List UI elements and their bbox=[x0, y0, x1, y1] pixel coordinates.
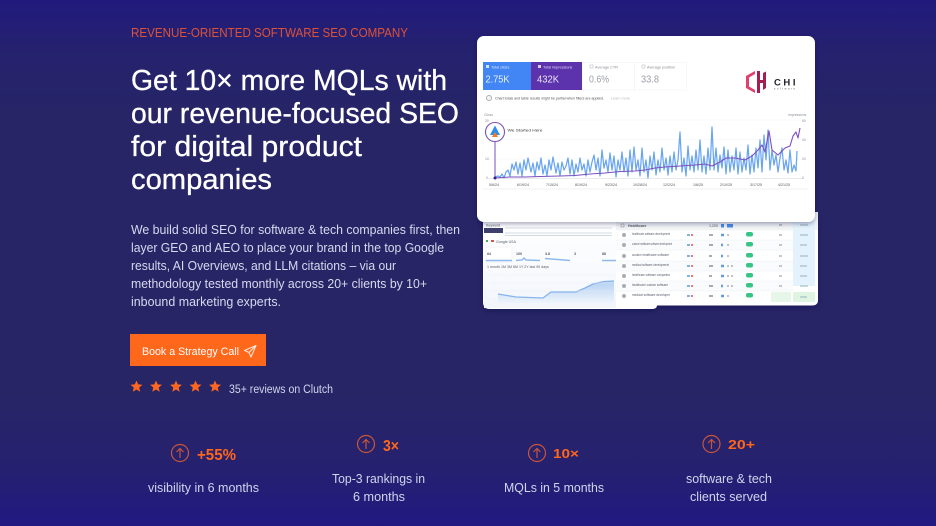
line chart: clicks and impressions: Clicks bbox=[484, 113, 493, 117]
description text: methodology tested monthly across 20+ clients by 10+ bbox=[131, 277, 427, 291]
metric tile: average position bbox=[634, 62, 686, 90]
stat: visibility bbox=[148, 444, 259, 495]
heading: for digital product bbox=[131, 131, 362, 163]
metric tile: average CTR: Average CTR bbox=[595, 66, 618, 70]
line chart: clicks and impressions: 30 bbox=[485, 119, 489, 123]
keyword rows: custom healthcare software development bbox=[632, 242, 672, 246]
date labels: 9/23/24 bbox=[605, 183, 617, 187]
row status badges bbox=[746, 232, 753, 298]
stat: top-3 rankings: Top-3 rankings in bbox=[332, 472, 425, 486]
stat: visibility: visibility in 6 months bbox=[148, 481, 259, 495]
impressions series bbox=[495, 128, 800, 178]
stat: clients served: 20+ bbox=[728, 438, 755, 452]
right panel: keyword table: Healthcare bbox=[628, 224, 646, 228]
date labels: 12/2/24 bbox=[663, 183, 675, 187]
dashboard card: search console chart bbox=[477, 36, 815, 222]
metric tile: average CTR bbox=[582, 62, 634, 90]
logo: CHI software bbox=[746, 71, 796, 93]
date labels: 10/28/24 bbox=[633, 183, 647, 187]
stat: visibility: +55% bbox=[197, 447, 236, 464]
description text: results, AI Overviews, and LLM citations – via our bbox=[131, 259, 396, 273]
date labels: 6/19/24 bbox=[517, 183, 529, 187]
stat: clients served: software & tech bbox=[686, 472, 772, 486]
keyword rows: healthcare software development bbox=[632, 232, 670, 236]
left panel: rank tracker bbox=[484, 222, 616, 308]
keyword rows: healthcare custom software bbox=[632, 283, 668, 287]
keyword rows: medical software development bbox=[632, 263, 669, 267]
heading bbox=[131, 65, 459, 196]
date labels: 7/15/24 bbox=[546, 183, 558, 187]
metric tile: average position: Average position bbox=[647, 66, 675, 70]
stat: clients served bbox=[686, 436, 772, 504]
stat: top-3 rankings bbox=[332, 436, 425, 504]
description text: inbound marketing experts. bbox=[131, 295, 281, 309]
keyword rows: healthcare software companies bbox=[632, 273, 670, 277]
left panel: rank tracker: 88 bbox=[602, 252, 606, 256]
date labels: 4/21/25 bbox=[778, 183, 790, 187]
heading: Get 10× more MQLs with bbox=[131, 65, 447, 97]
date labels: 3/17/25 bbox=[750, 183, 762, 187]
logo: CHI software: software bbox=[774, 86, 795, 90]
left panel: rank tracker: 3.8 bbox=[545, 252, 550, 256]
right panel: keyword table bbox=[616, 212, 818, 302]
metric tile: total clicks: 2.75K bbox=[486, 74, 510, 86]
notice text bbox=[486, 95, 630, 101]
date labels: 1/6/25 bbox=[693, 183, 703, 187]
start marker: we started here: We Started Here bbox=[508, 128, 542, 132]
stat: MQLs bbox=[504, 444, 604, 495]
star rating bbox=[131, 380, 221, 392]
metric tile: average position: 33.8 bbox=[641, 74, 659, 86]
heading: our revenue-focused SEO bbox=[131, 98, 459, 130]
dashboard card: back table bbox=[483, 212, 818, 309]
button: book a strategy call bbox=[130, 334, 266, 366]
right panel: keyword table: 1,200 bbox=[709, 224, 718, 228]
eyebrow: REVENUE-ORIENTED SOFTWARE SEO COMPANY bbox=[131, 26, 409, 40]
metric tile: total impressions bbox=[531, 62, 582, 90]
line chart: clicks and impressions: 20 bbox=[802, 157, 806, 161]
line chart: clicks and impressions: 10 bbox=[485, 157, 489, 161]
stat: top-3 rankings: 6 months bbox=[353, 490, 405, 504]
description text: We build solid SEO for software & tech companies first, then bbox=[131, 223, 460, 237]
left panel: rank tracker: Keyword bbox=[486, 224, 500, 228]
date labels: 5/6/24 bbox=[489, 183, 499, 187]
metric tile: total clicks bbox=[483, 62, 531, 90]
stat: clients served: clients served bbox=[690, 490, 767, 504]
line chart: clicks and impressions: 40 bbox=[802, 138, 806, 142]
date labels bbox=[489, 183, 790, 187]
keyword rows bbox=[632, 232, 672, 297]
stat: MQLs: MQLs in 5 months bbox=[504, 481, 604, 495]
notice text: Chart totals and table results might be partial when filters are applied. bbox=[495, 96, 604, 100]
metric tile: average CTR: 0.6% bbox=[589, 74, 609, 86]
line chart: clicks and impressions bbox=[483, 113, 808, 189]
metric tile: total impressions: Total impressions bbox=[543, 66, 572, 70]
stat: MQLs: 10× bbox=[553, 447, 579, 461]
metric tile: total clicks: Total clicks bbox=[491, 66, 509, 70]
metric tile: total impressions: 432K bbox=[537, 74, 559, 86]
line chart: clicks and impressions: 60 bbox=[802, 119, 806, 123]
heading: companies bbox=[131, 164, 272, 196]
line chart: clicks and impressions: Impressions bbox=[788, 113, 807, 117]
description text: layer GEO and AEO to place your brand in the top Google bbox=[131, 241, 444, 255]
date labels: 2/10/25 bbox=[720, 183, 732, 187]
left panel: rank tracker: 1 month 1M 3M 6M 1Y 2Y last 90 days bbox=[487, 265, 549, 269]
left panel: rank tracker: 84 bbox=[487, 252, 491, 256]
line chart: visibility bbox=[492, 275, 614, 303]
icon: arrow up circle bbox=[528, 444, 546, 462]
line chart: clicks and impressions: 0 bbox=[486, 176, 488, 180]
reviews text: 35+ reviews on Clutch bbox=[229, 384, 333, 396]
line chart: clicks and impressions: 0 bbox=[802, 176, 804, 180]
stat: top-3 rankings: 3× bbox=[383, 438, 399, 455]
left panel: rank tracker: 3 bbox=[574, 252, 576, 256]
date labels: 8/19/24 bbox=[575, 183, 587, 187]
keyword rows: custom healthcare software bbox=[632, 253, 669, 257]
left panel: rank tracker: Google USA bbox=[496, 240, 517, 244]
clicks series bbox=[495, 127, 797, 178]
row indicators bbox=[624, 225, 808, 297]
icon: paper plane bbox=[244, 346, 256, 357]
icon: arrow up circle bbox=[703, 436, 720, 452]
description text bbox=[131, 223, 460, 309]
notice text: Learn more bbox=[611, 96, 630, 100]
button: book a strategy call: Book a Strategy Call bbox=[142, 346, 239, 358]
left panel: rank tracker: 100 bbox=[516, 252, 522, 256]
keyword rows: medical software developer bbox=[632, 293, 671, 297]
start marker: we started here bbox=[486, 122, 542, 180]
icon: arrow up circle bbox=[172, 444, 188, 462]
icon: arrow up circle bbox=[358, 436, 374, 452]
logo: CHI software: CHI bbox=[774, 78, 796, 88]
